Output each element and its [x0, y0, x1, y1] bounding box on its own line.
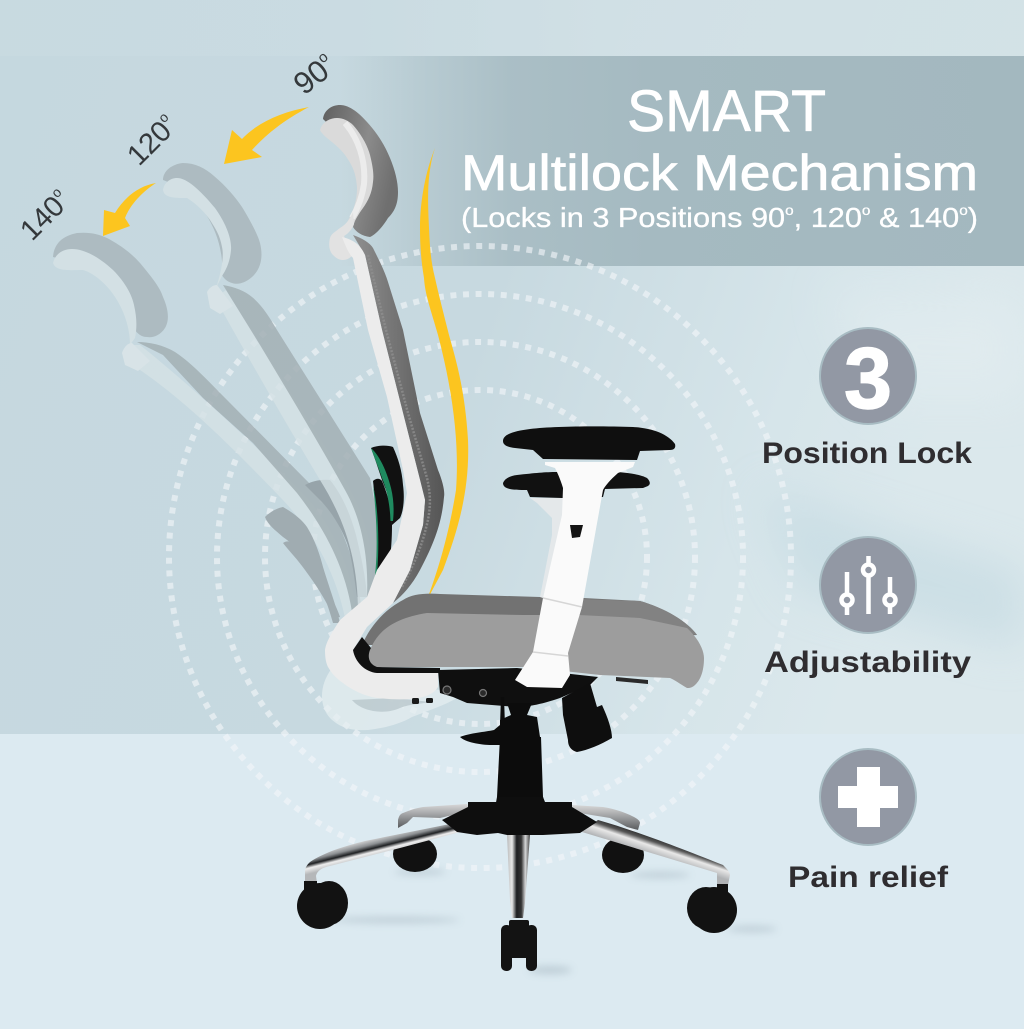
header band: [340, 56, 1024, 266]
gas lift column: [460, 697, 546, 808]
rear chrome leg left: [398, 804, 470, 828]
angle arrow 120 to 140: [103, 183, 156, 236]
angle label 90: 90: [287, 53, 335, 102]
headrest connector: [329, 212, 354, 260]
ghost headrest back 120: [163, 163, 261, 284]
seat black under trim: [353, 637, 440, 673]
concentric dotted circles: [169, 246, 791, 868]
title: [461, 79, 978, 233]
height lever: [460, 697, 505, 745]
lumbar support: [371, 446, 404, 596]
ghost frame 120: [215, 290, 372, 612]
top strip highlight: [0, 0, 1024, 56]
mechanism bolts: [443, 686, 486, 696]
ghost lumbar upper 140: [305, 480, 367, 597]
seat right top face: [578, 599, 697, 635]
ghost connector 140: [122, 343, 150, 371]
lumbar lower pad: [372, 479, 392, 596]
icon: number 3: [820, 328, 916, 427]
ghost headrest cushion 140: [53, 249, 136, 345]
ghost backrest mesh 140: [137, 342, 362, 612]
black base hub: [442, 797, 597, 835]
subtitle: , 120: [794, 202, 862, 233]
angle label 90: o: [315, 48, 332, 67]
angle label 120: o: [155, 109, 172, 126]
ghost headrest cushion 120: [163, 178, 231, 288]
tension knob: [562, 683, 612, 752]
headrest back cushion: [323, 105, 398, 237]
front caster centre: [501, 920, 537, 971]
front caster left: [297, 881, 348, 929]
subtitle: & 140: [870, 202, 959, 233]
rear caster left: [393, 836, 437, 872]
seat top face: [362, 594, 697, 645]
armrest latch: [570, 525, 583, 538]
ghost connector 120: [207, 285, 233, 314]
armrest column seam: [533, 598, 582, 656]
lumbar green lower edge: [372, 485, 378, 596]
ghost headrest back 140: [53, 233, 168, 337]
backrest mesh seam: [368, 255, 430, 587]
title line: SMART: SMART: [627, 79, 826, 144]
feature: adjustability: [764, 537, 971, 679]
seat front face: [368, 613, 704, 688]
lumbar black upper pad: [371, 446, 404, 525]
yellow spine curve: [420, 148, 468, 600]
ghost frame 140: [128, 345, 357, 618]
lumbar green upper edge: [371, 448, 394, 521]
seat label tag: [616, 677, 648, 684]
angle label 140: 140: [14, 190, 71, 247]
subtitle: o: [862, 202, 871, 218]
icon: sliders: [820, 537, 916, 633]
subtitle: o: [959, 202, 968, 218]
front chrome leg centre: [507, 835, 530, 918]
armrest top pad: [503, 426, 675, 460]
armrest lower plate: [530, 498, 563, 598]
ghost backrest mesh 120: [223, 285, 378, 610]
armrest white column: [515, 462, 635, 688]
backrest mesh: [353, 235, 444, 603]
ghost recline swing under seat: [322, 668, 457, 730]
ghost chair: 140 degree position: [53, 233, 367, 618]
label: pain relief: Pain relief: [788, 861, 949, 894]
title line: Multilock Mechanism: Multilock Mechanism: [461, 145, 978, 201]
mechanism small knobs: [412, 698, 433, 704]
ghost lumbar lower: [265, 507, 340, 623]
icon: plus: [820, 749, 916, 845]
chair: [297, 105, 777, 974]
lift lower cylinder: [495, 737, 546, 808]
front chrome leg left: [305, 824, 460, 883]
angle arrow 90 to 120: [224, 107, 309, 164]
feature: pain relief: [788, 749, 949, 894]
armrest lower pad: [503, 472, 650, 498]
subtitle: (Locks in 3 Positions 90: [461, 202, 757, 233]
label: position lock: Position Lock: [762, 437, 972, 470]
ghost chair: 120 degree position: [163, 163, 378, 612]
rear caster right: [602, 837, 644, 873]
lift top collar: [500, 703, 540, 737]
subtitle: ): [968, 202, 978, 233]
white back frame: [325, 237, 438, 699]
rear chrome leg right: [572, 805, 640, 830]
background wall: [0, 0, 1024, 734]
label: adjustability: Adjustability: [764, 646, 971, 679]
seat tilt mechanism: [438, 668, 598, 707]
headrest stripe: [345, 123, 364, 218]
front caster right: [687, 884, 737, 933]
feature: 3 position lock: [762, 328, 972, 470]
wall light streaks: [760, 290, 1024, 650]
floor shadows: [330, 869, 777, 974]
subtitle: o: [785, 202, 794, 218]
headrest light cushion: [320, 118, 373, 232]
icon: number 3: 3: [844, 331, 892, 427]
angle label 120: 120: [121, 115, 178, 172]
floor: [0, 734, 1024, 1029]
front chrome leg right: [582, 820, 730, 885]
angle label 140: o: [48, 184, 65, 201]
